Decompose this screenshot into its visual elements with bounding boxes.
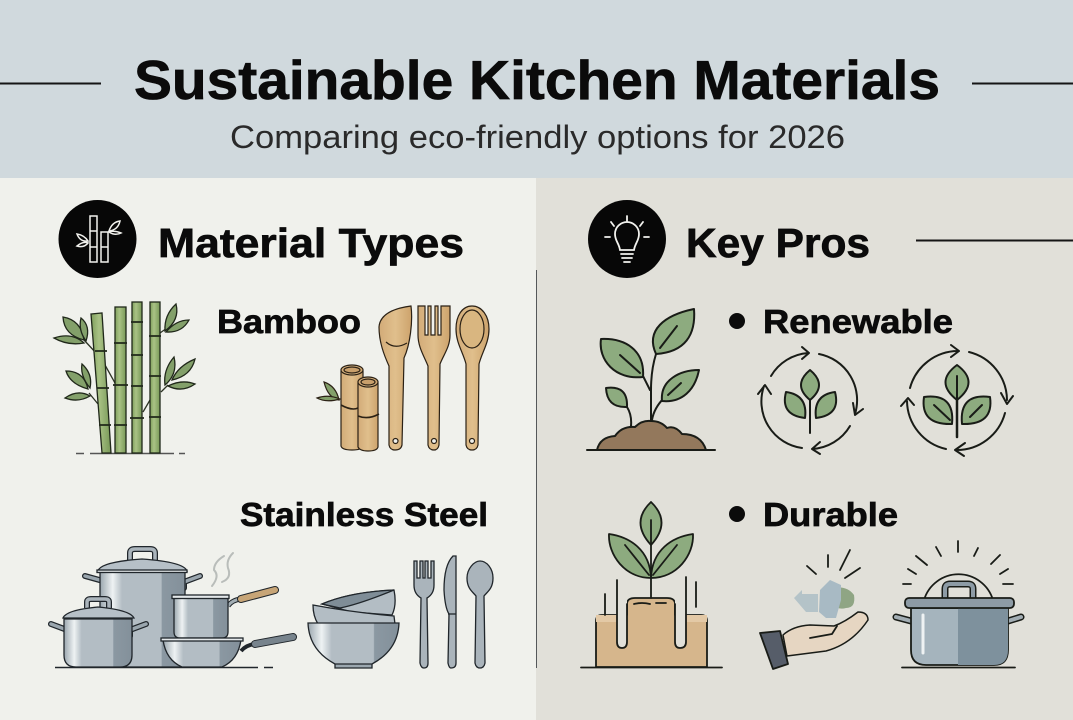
- icon: hand holding material: [760, 550, 868, 669]
- label: stainless steel: Stainless Steel: [240, 496, 488, 533]
- icon: durable pot: [896, 541, 1021, 668]
- icon: renewable cycle one: [758, 347, 863, 454]
- panel: header background: [0, 0, 1073, 178]
- spatula: [379, 306, 412, 450]
- heading: key pros: Key Pros: [686, 220, 870, 266]
- icon: light bulb badge: [588, 200, 666, 278]
- spoon: [456, 306, 489, 450]
- icon: renewable cycle two: [901, 345, 1013, 456]
- icon: plant in bamboo block: [581, 502, 722, 668]
- title: Sustainable Kitchen Materials: [134, 49, 940, 111]
- bullet: renewable: Renewable: [763, 303, 953, 340]
- icon: sprout in soil: [587, 309, 715, 450]
- icon: bamboo stalks: [54, 302, 195, 454]
- icon: bamboo badge: [58, 200, 136, 278]
- panel: key pros background: [536, 178, 1073, 720]
- label: bamboo: Bamboo: [217, 303, 361, 340]
- icon: pots and pans: [51, 549, 293, 668]
- icon: stacked bowls: [308, 590, 399, 668]
- heading: material types: Material Types: [158, 220, 464, 266]
- icon: fork, knife and spoon: [414, 556, 493, 668]
- panel: material types background: [0, 178, 536, 720]
- subtitle: Comparing eco-friendly options for 2026: [230, 119, 845, 155]
- icon: bamboo logs and utensils: [317, 306, 489, 451]
- bullet: durable: Durable: [763, 496, 898, 533]
- fork: [418, 306, 450, 450]
- icon: steam: [212, 553, 233, 586]
